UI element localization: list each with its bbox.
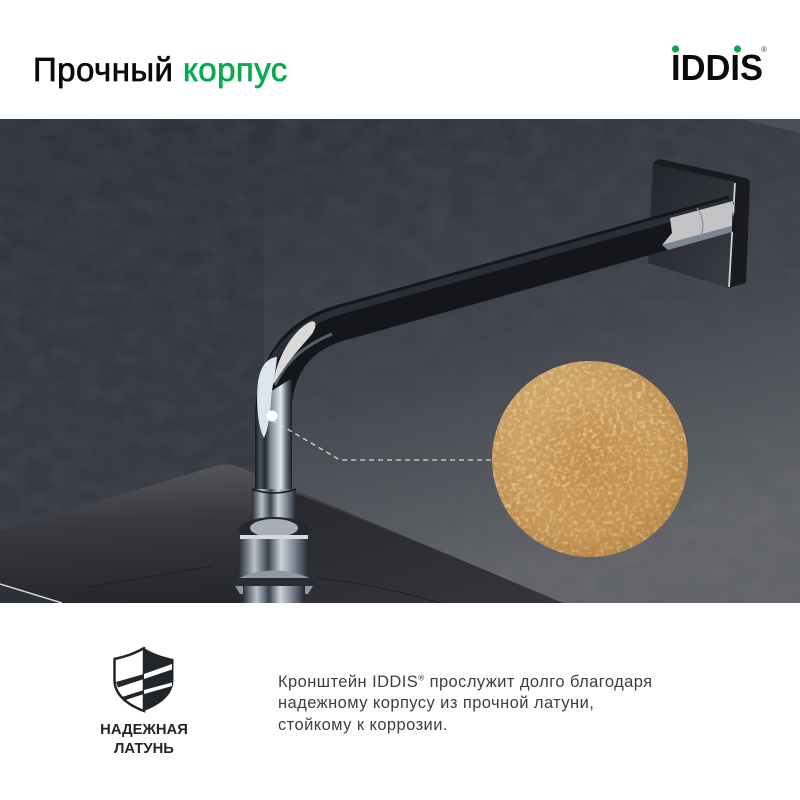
callout: dashed leader line — [266, 410, 492, 460]
vertical chrome stem — [255, 321, 316, 494]
logo: IDDIS: ® — [761, 45, 767, 54]
description text — [278, 673, 653, 734]
icon: shield — [113, 647, 174, 713]
photo: faucet arm on dark wall — [0, 119, 800, 603]
icon label: ЛАТУНЬ — [114, 741, 174, 757]
description text: надежному корпусу из прочной латуни, — [278, 694, 594, 712]
icon label — [100, 722, 188, 757]
description text: стойкому к коррозии. — [278, 716, 448, 734]
description text: Кронштейн IDDIS® прослужит долго благодаря — [278, 673, 653, 691]
icon label: НАДЕЖНАЯ — [100, 722, 188, 738]
chrome collar and base — [232, 489, 316, 603]
wall — [0, 119, 800, 603]
sink — [0, 464, 563, 603]
wall mount plate — [648, 159, 750, 288]
brass texture circle — [490, 359, 690, 559]
pipe arm — [268, 201, 733, 496]
title: Прочный корпус — [33, 51, 288, 88]
